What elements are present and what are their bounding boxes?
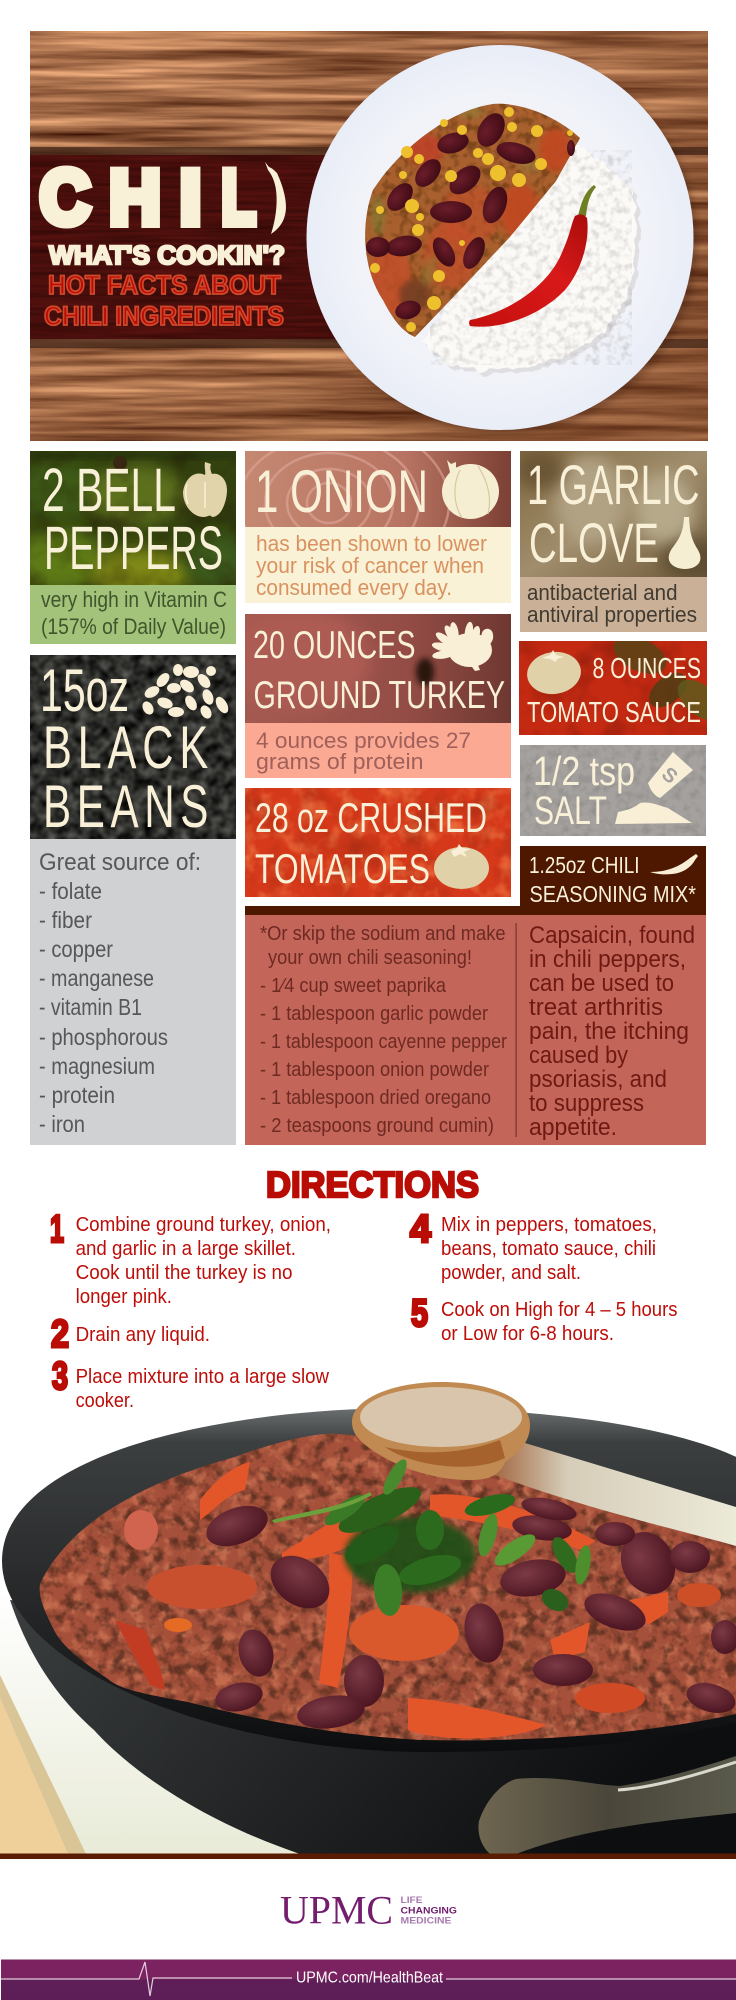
logo: UPMC: MEDICINE [400,1916,452,1926]
tabletop and cutting board [0,1590,300,1854]
photo: crushed tomatoes [245,788,511,897]
step 2: 2 [51,1313,69,1356]
icon: tomato [524,648,584,698]
caption: antiviral properties [527,602,697,627]
panel: garlic: CLOVE [529,511,659,574]
nutrient list: - copper [39,936,113,962]
step 2 [51,1313,210,1356]
step 4 [410,1208,657,1284]
photo: pan of chili [0,1382,736,1854]
heading: 20 OUNCES [253,624,416,667]
caption: grams of protein [256,749,424,774]
directions steps [50,1208,678,1412]
step 5: Cook on High for 4 – 5 hours [441,1299,678,1321]
panel: onion [245,451,511,603]
homemade seasoning recipe: *Or skip the sodium and make [260,923,506,945]
panel: salt [520,745,706,836]
seasoning header: 1.25oz CHILI [529,852,640,878]
step 2: Drain any liquid. [76,1324,210,1346]
panel: garlic [520,451,707,632]
title: CHILI: L [222,156,256,240]
logo: UPMC: CHANGING [400,1906,457,1916]
subtitle: CHILI INGREDIENTS [44,301,284,331]
step 3: cooker. [76,1390,134,1412]
nutrient list: - fiber [39,907,92,933]
step 5: or Low for 6-8 hours. [441,1323,614,1345]
icon: salt shaker: S [657,763,682,788]
title: CHILI: C [40,156,90,240]
subtitle: HOT FACTS ABOUT [48,270,281,300]
homemade seasoning recipe: - 1 tablespoon garlic powder [260,1003,488,1025]
step 5: 5 [411,1292,428,1335]
capsaicin fact: in chili peppers, [529,946,686,973]
pan body [10,1600,736,1854]
panel: black beans [30,655,236,1145]
icon: salt pile [615,803,692,824]
photo: garlic [520,451,707,577]
icon: turkey [431,621,493,671]
panel: bell peppers [30,451,236,644]
logo: UPMC: LIFE [400,1895,422,1906]
step 4: 4 [410,1208,431,1251]
caption [520,577,707,632]
photo: ground turkey [230,610,511,723]
rice [423,143,640,374]
title: CHILI [40,156,286,240]
caption: has been shown to lower [256,531,487,556]
pan rim [2,1408,736,1752]
title band [30,155,350,339]
capsaicin fact [529,922,695,1141]
capsaicin fact: Capsaicin, found [529,922,695,949]
seasoning header [245,846,706,915]
chili stew on plate [355,100,585,340]
wood table background [30,31,708,441]
panel: tomato sauce [519,641,707,735]
footer bar [1,1960,736,2000]
capsaicin fact: treat arthritis [529,994,663,1021]
parsley garnish [272,1456,593,1617]
caption: antibacterial and [527,580,678,605]
nutrient list [30,839,236,1145]
nutrient list: - folate [39,878,102,904]
plate [306,45,698,434]
panel: crushed tomatoes: TOMATOES [255,845,430,892]
homemade seasoning recipe: - 2 teaspoons ground cumin) [260,1115,494,1137]
subtitle [44,242,285,331]
divider bar [0,1854,736,1859]
kidney beans [366,108,575,322]
icon: chili as letter I [265,162,286,234]
nutrient list: - vitamin B1 [39,994,142,1020]
icon: beans [140,664,231,721]
homemade seasoning recipe: - 1 tablespoon dried oregano [260,1087,491,1109]
heading: 15oz [40,657,129,724]
step 4: powder, and salt. [441,1262,581,1284]
caption: your risk of cancer when [256,553,484,578]
step 1: 1 [50,1208,64,1251]
logo: UPMC [280,1888,457,1932]
caption [245,723,511,778]
panel: black beans: BEANS [43,773,214,840]
icon: garlic clove [669,517,700,569]
photo: tomato sauce [519,641,707,735]
photo: black beans [30,655,236,839]
heartbeat line [1,1962,736,1996]
wooden spoon [352,1382,736,1546]
caption: 4 ounces provides 27 [256,728,471,753]
capsaicin fact: pain, the itching [529,1018,689,1045]
step 3: Place mixture into a large slow [76,1366,330,1388]
photo: onion rings [245,451,511,527]
nutrient list: - manganese [39,965,154,991]
panel: salt: SALT [534,789,607,833]
caption: (157% of Daily Value) [41,614,226,639]
homemade seasoning recipe: your own chili seasoning! [268,947,472,969]
homemade seasoning recipe: - 1⁄4 cup sweet paprika [260,975,447,997]
seasoning header: SEASONING MIX* [530,881,696,907]
capsaicin fact: appetite. [529,1114,617,1141]
homemade seasoning recipe: - 1 tablespoon cayenne pepper [260,1031,507,1053]
caption: consumed every day. [256,575,452,600]
red chili pepper [469,185,596,327]
heading: 1 ONION [255,458,428,525]
step 1 [50,1208,331,1308]
seasoning block [245,915,706,1145]
step 3 [52,1355,330,1412]
nutrient list: - magnesium [39,1053,155,1079]
nutrient list: - iron [39,1111,85,1137]
panel: ground turkey: GROUND TURKEY [254,674,505,717]
footer url: UPMC.com/HealthBeat [296,1970,443,1986]
title: CHILI: H [110,156,160,240]
title: CHILI: I [180,156,201,240]
stew [30,1425,736,1745]
icon: tomato [434,844,489,889]
icon: chili [650,854,698,874]
vegetables [115,1462,721,1738]
nutrient list: Great source of: [39,849,201,876]
subtitle: WHAT'S COOKIN'? [49,242,285,270]
homemade seasoning recipe [260,923,507,1137]
corn kernels [370,107,573,332]
step 3: 3 [52,1355,68,1398]
step 4: beans, tomato sauce, chili [441,1238,656,1260]
panel: crushed tomatoes [245,788,511,897]
capsaicin fact: psoriasis, and [529,1066,667,1093]
panel: chili seasoning [245,846,706,1145]
pan handle [478,1756,736,1854]
capsaicin fact: can be used to [529,970,674,997]
caption: very high in Vitamin C [41,587,227,612]
step 1: Combine ground turkey, onion, [76,1214,331,1236]
nutrient list: - protein [39,1082,115,1108]
capsaicin fact: caused by [529,1042,628,1069]
heading: directions: DIRECTIONS [266,1164,479,1205]
caption [245,527,511,603]
photo: stone texture [520,745,706,836]
icon: onion [442,460,499,519]
heading: BLACK [43,714,214,781]
hero panel [30,31,708,441]
step 1: longer pink. [76,1286,172,1308]
step 1: Cook until the turkey is no [76,1262,292,1284]
homemade seasoning recipe: - 1 tablespoon onion powder [260,1059,489,1081]
nutrient list: - phosphorous [39,1024,168,1050]
panel: bell peppers: PEPPERS [44,514,223,582]
logo: UPMC: UPMC [280,1888,393,1932]
heading: 2 BELL [42,456,176,524]
icon: bell pepper [183,462,227,517]
step 1: and garlic in a large skillet. [76,1238,296,1260]
step 5 [411,1292,678,1345]
kidney beans [201,1493,736,1733]
step 4: Mix in peppers, tomatoes, [441,1214,657,1236]
capsaicin fact: to suppress [529,1090,644,1117]
panel: ground turkey [230,610,511,778]
heading: 1/2 tsp [533,748,635,794]
photo: green peppers [30,451,236,585]
icon: salt shaker [648,752,693,798]
caption [30,585,236,644]
heading: 28 oz CRUSHED [255,794,487,841]
